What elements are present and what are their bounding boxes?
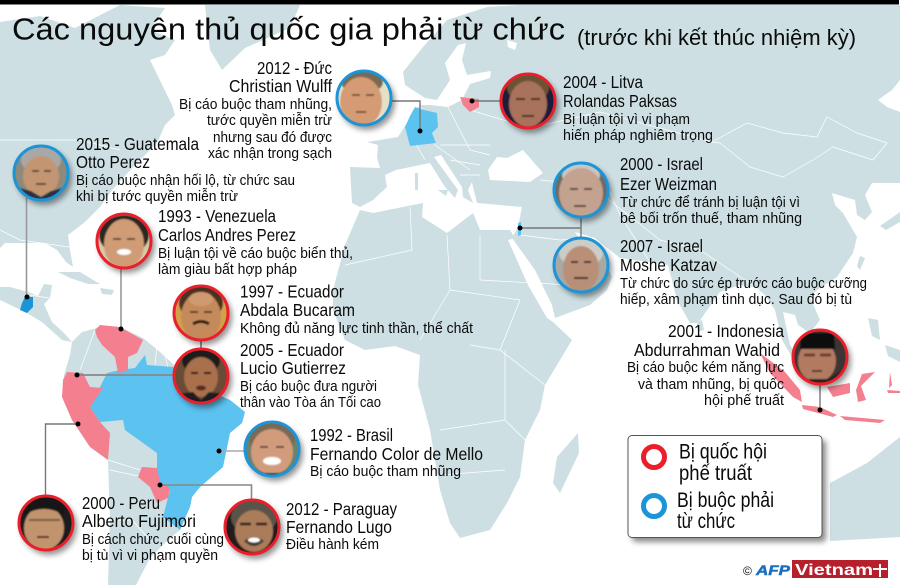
land: South America (62, 327, 245, 585)
text: Alberto Fujimori: bị tù vì vi phạm quyền (82, 547, 218, 564)
text: Moshe Katzav: 2007 - Israel (620, 236, 703, 256)
country: Paraguay (138, 467, 170, 503)
text: Rolandas Paksas (563, 72, 713, 144)
legend: blue label: Bị buộc phải (677, 489, 774, 512)
text: Fernando Color de Mello: Fernando Color de Mello (310, 444, 483, 464)
text: Carlos Andres Perez: Carlos Andres Perez (158, 225, 296, 245)
entry: Christian Wulff (179, 58, 395, 162)
photo: Otto Perez (13, 145, 72, 205)
connector: Guatemala (24, 198, 30, 300)
text: Alberto Fujimori: 2000 - Peru (82, 493, 160, 513)
entry: Fernando Color de Mello (244, 421, 483, 481)
text: Abdala Bucaram (240, 282, 474, 337)
photo: Lucio Gutierrez (173, 348, 232, 408)
credit: AFP and Vietnam+: Vietnam (795, 562, 873, 579)
country: Lithuania (460, 97, 479, 112)
text: Lucio Gutierrez: Lucio Gutierrez (240, 358, 346, 378)
connector: Venezuela (118, 268, 124, 332)
text: Abdala Bucaram: Không đủ năng lực tinh thần, thể chất (240, 320, 474, 337)
inland seas (488, 40, 572, 192)
text: Otto Perez (76, 134, 295, 205)
subtitle: (trước khi kết thúc nhiệm kỳ) (577, 25, 856, 50)
text: Christian Wulff: Christian Wulff (229, 76, 332, 96)
entry: Otto Perez (13, 134, 295, 205)
entry: Ezer Weizman (553, 154, 802, 227)
text: Fernando Lugo: Fernando Lugo (286, 517, 392, 537)
entry: Fernando Lugo (224, 499, 397, 559)
land: Madagascar (553, 433, 579, 493)
text: Abdurrahman Wahid: Abdurrahman Wahid (634, 340, 780, 360)
text: Rolandas Paksas: 2004 - Litva (563, 72, 643, 92)
credit: AFP and Vietnam+: AFP (755, 562, 791, 578)
photo: Rolandas Paksas (500, 73, 559, 133)
text: Moshe Katzav (620, 236, 867, 308)
text: Alberto Fujimori: Bị cách chức, cuối cùng (82, 531, 224, 548)
text: Lucio Gutierrez: thân vào Tòa án Tối cao (240, 394, 381, 411)
text: Alberto Fujimori (82, 493, 224, 564)
text: Fernando Color de Mello: 1992 - Brasil (310, 425, 393, 445)
text: Abdala Bucaram: Abdala Bucaram (240, 300, 355, 320)
connector: Peru (46, 422, 80, 497)
legend: red ring (644, 446, 664, 468)
text: Christian Wulff: 2012 - Đức (257, 58, 332, 78)
text: Otto Perez: Otto Perez (76, 152, 150, 172)
text: Moshe Katzav: Moshe Katzav (620, 255, 717, 275)
connector: Ecuador (74, 338, 201, 378)
text: Lucio Gutierrez: 2005 - Ecuador (240, 340, 344, 360)
entry: Abdurrahman Wahid (627, 321, 851, 409)
country: Venezuela (95, 325, 143, 373)
country: Indonesia (760, 353, 900, 423)
legend: blue ring (644, 496, 664, 516)
legend: red label: phế truất (679, 462, 752, 485)
legend: red label (679, 440, 767, 485)
connector: Indonesia (818, 383, 822, 412)
connector: Paraguay (158, 482, 252, 502)
photo: Moshe Katzav (553, 237, 612, 297)
text: Fernando Lugo: 2012 - Paraguay (286, 499, 397, 519)
text: Moshe Katzav: hiếp, xâm phạm tình dục. Sau đó bị tù (620, 291, 852, 308)
text: Abdurrahman Wahid: hội phế truất (704, 392, 785, 409)
land: North America (0, 5, 175, 267)
photo: Fernando Lugo (224, 499, 283, 559)
text: Fernando Lugo (286, 499, 397, 553)
connector: Israel (518, 216, 581, 240)
text: Christian Wulff: Bị cáo buộc tham nhũng, (179, 96, 332, 113)
text: Christian Wulff (179, 58, 332, 162)
country: Brazil (90, 355, 245, 530)
entry: Carlos Andres Perez (96, 206, 353, 278)
text: Christian Wulff: tước quyền miễn trừ (207, 112, 332, 129)
text: Rolandas Paksas: Rolandas Paksas (563, 91, 677, 111)
text: Moshe Katzav: Từ chức do sức ép trước cáo buộc cưỡng (620, 275, 867, 292)
text: Ezer Weizman: 2000 - Israel (620, 154, 703, 174)
photo: Alberto Fujimori (18, 495, 77, 555)
text: Christian Wulff: nhưng sau đó được (213, 129, 332, 146)
text: Carlos Andres Perez: 1993 - Venezuela (158, 206, 276, 226)
text: Otto Perez: Bị cáo buộc nhận hối lộ, từ chức sau (76, 172, 295, 189)
text: Rolandas Paksas: hiến pháp nghiêm trọng (563, 127, 713, 144)
connector: Lithuania (470, 98, 502, 104)
highlighted countries (20, 97, 900, 530)
text: Ezer Weizman: Từ chức để tránh bị luận tội vì (620, 194, 800, 211)
text: Abdurrahman Wahid: Bị cáo buộc kém năng lực (627, 359, 784, 376)
land: Caribbean islands (58, 272, 114, 295)
country: Guatemala (20, 297, 33, 313)
country borders (0, 105, 887, 540)
land: Japan, Philippines, New Guinea, islands (415, 173, 900, 362)
photo: Ezer Weizman (553, 162, 612, 222)
title: Các nguyên thủ quốc gia phải từ chức (12, 12, 565, 46)
text: Rolandas Paksas: Bị luận tội vì vi phạm (563, 111, 690, 128)
land: Greenland (205, 5, 300, 70)
land: Mexico and Central America (0, 284, 72, 342)
text: Lucio Gutierrez: Bị cáo buộc đưa người (240, 378, 377, 395)
land: Eurasia (350, 5, 900, 365)
land: Africa (333, 203, 572, 538)
credit: AFP and Vietnam+: © (743, 564, 752, 578)
text: Abdala Bucaram: 1997 - Ecuador (240, 282, 344, 302)
top bar (0, 0, 899, 4)
land: Australia (830, 437, 900, 541)
legend (628, 436, 826, 542)
text: Abdurrahman Wahid (627, 321, 785, 409)
text: Carlos Andres Perez: làm giàu bất hợp pháp (158, 261, 297, 278)
country: Peru and Ecuador (62, 372, 110, 460)
text: Carlos Andres Perez: Bị luận tội về cáo buộc biển thủ, (158, 245, 353, 262)
text: Ezer Weizman: bê bối trốn thuế, tham nhũng (620, 210, 802, 227)
credit: AFP and Vietnam+ (743, 560, 888, 579)
text: Alberto Fujimori: Alberto Fujimori (82, 511, 196, 531)
photo: Fernando Color de Mello (244, 421, 303, 481)
text: Ezer Weizman (620, 154, 802, 227)
text: Otto Perez: 2015 - Guatemala (76, 134, 199, 154)
country: Israel (518, 222, 521, 236)
text: Christian Wulff: xác nhận trong sạch (208, 145, 332, 162)
entry: Lucio Gutierrez (173, 340, 381, 411)
photo: Abdala Bucaram (173, 285, 232, 345)
country: Germany (405, 107, 438, 146)
text: Abdurrahman Wahid: 2001 - Indonesia (668, 321, 784, 341)
text: Carlos Andres Perez (158, 206, 353, 278)
text: Lucio Gutierrez (240, 340, 381, 411)
photo: Christian Wulff (336, 70, 395, 130)
text: Otto Perez: khi bị tước quyền miễn trừ (76, 188, 238, 205)
photo: Carlos Andres Perez (96, 213, 155, 273)
text: Abdurrahman Wahid: và tham nhũng, bị quốc (638, 376, 784, 393)
entry: Moshe Katzav (553, 236, 867, 308)
connector: Germany (392, 101, 422, 134)
text: Ezer Weizman: Ezer Weizman (620, 174, 717, 194)
entry: Rolandas Paksas (500, 72, 713, 144)
legend: red label: Bị quốc hội (679, 440, 767, 464)
text: Fernando Lugo: Điều hành kém (286, 536, 379, 553)
legend: blue label: từ chức (677, 510, 735, 533)
entry: Alberto Fujimori (18, 493, 224, 564)
connector lines and location dots (24, 98, 822, 502)
photo: Abdurrahman Wahid (792, 329, 851, 389)
entry: Abdala Bucaram (173, 282, 474, 345)
text: Fernando Color de Mello (310, 425, 483, 480)
legend: blue label (677, 489, 774, 533)
text: Fernando Color de Mello: Bị cáo buộc tham nhũng (310, 463, 461, 480)
connector: Brazil (216, 448, 246, 454)
